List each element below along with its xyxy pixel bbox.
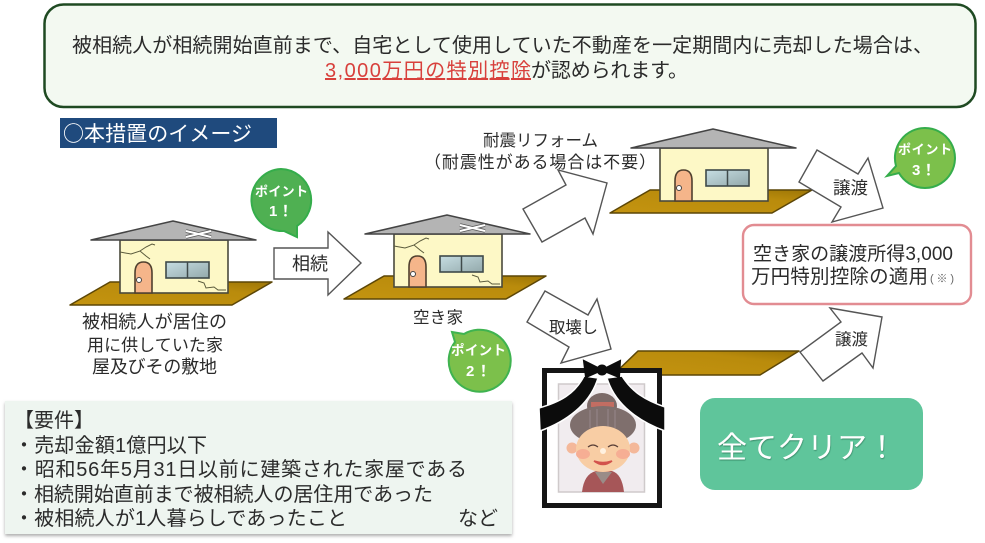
label: seismic retrofit: 耐震リフォーム xyxy=(483,131,598,150)
text: requirements heading: 【要件】 xyxy=(14,409,94,432)
heading: image of this measure: ○本措置のイメージ xyxy=(63,118,252,148)
callout: special deduction applied: (※) xyxy=(930,273,954,285)
label: inherited home: 被相続人が居住の xyxy=(82,312,227,332)
callout: point 3: 3！ xyxy=(912,162,936,179)
callout: point 3 xyxy=(887,128,955,188)
arrow: demolition xyxy=(527,291,611,363)
text: summary line 2 xyxy=(325,59,688,82)
label: inherited home: 用に供していた家 xyxy=(87,336,223,355)
illustration: memorial portrait xyxy=(539,361,665,506)
text: requirement sale price: ・売却金額1億円以下 xyxy=(14,434,207,457)
arrow: transfer lower xyxy=(800,308,882,381)
text: requirement build date: ・昭和56年5月31日以前に建築された家屋である xyxy=(14,458,467,481)
callout: special deduction applied xyxy=(743,225,971,304)
house: vacant home with cracks xyxy=(344,215,546,299)
badge: all cleared: 全てクリア！ xyxy=(717,432,897,465)
panel: requirements xyxy=(5,401,512,534)
callout: point 1: ポイント xyxy=(255,184,308,199)
callout: point 1: 1！ xyxy=(269,203,293,220)
label: vacant home: 空き家 xyxy=(413,308,463,327)
callout: point 1 xyxy=(251,169,311,237)
label: seismic retrofit: （耐震性がある場合は不要） xyxy=(424,153,656,172)
label: inherited home xyxy=(82,312,227,377)
arrow: to retrofit xyxy=(523,170,607,242)
arrow: transfer upper: 譲渡 xyxy=(833,178,868,198)
label: seismic retrofit xyxy=(424,131,656,172)
text: summary line 1: 被相続人が相続開始直前まで、自宅として使用していた不動産を一定期間内に売却した場合は、 xyxy=(72,34,933,57)
callout: point 2: 2！ xyxy=(466,363,491,380)
callout: special deduction applied: 万円特別控除の適用 xyxy=(751,266,928,288)
text: etc: など xyxy=(458,507,498,530)
text: summary line 2: 3,000万円の特別控除 xyxy=(325,59,531,82)
arrow: transfer upper xyxy=(799,150,883,222)
arrow: inheritance xyxy=(274,232,361,295)
text: requirement residence: ・相続開始直前まで被相続人の居住用であった xyxy=(14,483,433,506)
house: inherited home with cracks xyxy=(70,221,272,305)
callout: special deduction applied: 空き家の譲渡所得3,000 xyxy=(753,243,953,265)
label: inherited home: 屋及びその敷地 xyxy=(92,357,217,377)
ground: vacant lot xyxy=(613,351,799,375)
house: retrofitted home xyxy=(610,129,812,213)
text: requirement sole occupant: ・被相続人が1人暮らしであったこと xyxy=(14,507,347,530)
panel: summary statement xyxy=(44,4,976,107)
callout: point 3: ポイント xyxy=(898,142,952,157)
arrow: inheritance: 相続 xyxy=(292,254,328,274)
badge: all cleared xyxy=(700,398,923,490)
callout: point 2 xyxy=(449,330,511,392)
callout: point 2: ポイント xyxy=(451,343,506,358)
arrow: demolition: 取壊し xyxy=(549,318,598,337)
arrow: transfer lower: 譲渡 xyxy=(835,330,868,349)
text: summary line 2: が認められます。 xyxy=(531,59,688,82)
